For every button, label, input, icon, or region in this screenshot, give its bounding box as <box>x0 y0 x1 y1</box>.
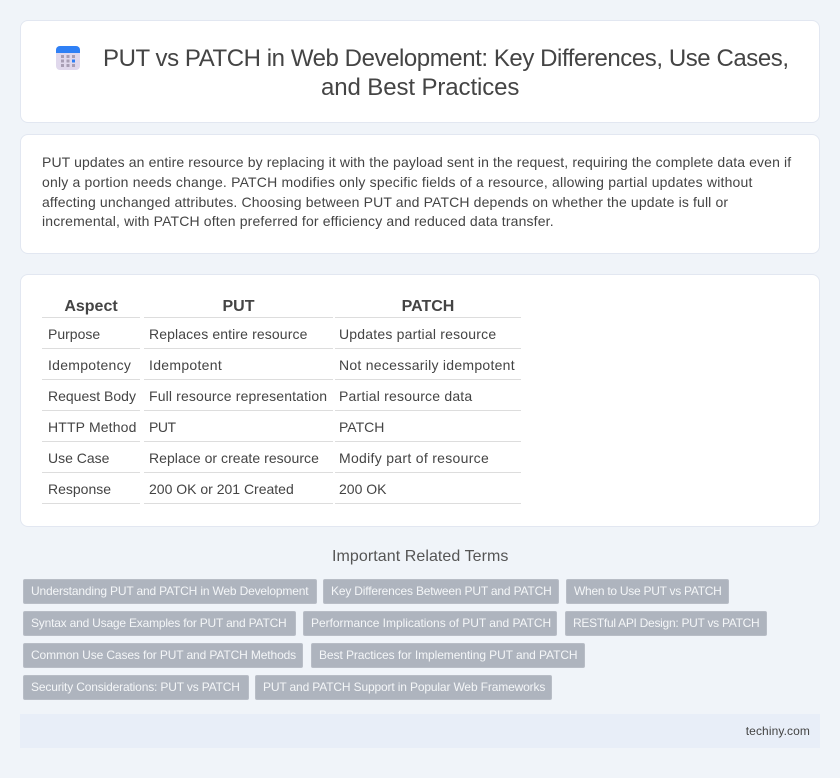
tag: Common Use Cases for PUT and PATCH Methods <box>31 648 296 662</box>
title: and Best Practices <box>321 74 519 101</box>
panel: header card <box>20 20 820 123</box>
row: Use Case: Replace or create resource <box>149 450 319 466</box>
row: Request Body: Request Body <box>48 388 136 404</box>
comparison table <box>42 298 521 504</box>
row: Request Body <box>42 388 521 411</box>
heading: important related terms: Important Related Terms <box>332 548 509 565</box>
text block: introduction: incremental, with PATCH often preferred for efficiency and reduced data transfer. <box>42 213 554 229</box>
row: Response <box>42 481 521 504</box>
row: Response: 200 OK or 201 Created <box>149 481 294 497</box>
row: Idempotency <box>42 357 521 380</box>
text block: introduction: affecting unchanged attributes. Choosing between PUT and PATCH depends on whether the update is full or <box>42 194 728 210</box>
tag <box>565 611 767 636</box>
tag: Understanding PUT and PATCH in Web Development <box>31 584 308 598</box>
tag: RESTful API Design: PUT vs PATCH <box>573 616 759 630</box>
row: Response: 200 OK <box>339 481 386 497</box>
row: Idempotency: Idempotent <box>149 357 222 373</box>
text block: introduction <box>42 154 792 229</box>
table header row <box>42 298 521 318</box>
row: Purpose: Purpose <box>48 326 100 342</box>
row: Use Case <box>42 450 521 473</box>
row: Purpose: Replaces entire resource <box>149 326 308 342</box>
tag: Performance Implications of PUT and PATCH <box>311 616 551 630</box>
title: PUT vs PATCH in Web Development: Key Differences, Use Cases, <box>103 45 789 72</box>
row: HTTP Method: HTTP Method <box>48 419 137 435</box>
tag: Key Differences Between PUT and PATCH <box>331 584 552 598</box>
tag <box>303 611 557 636</box>
panel: comparison table card <box>20 274 820 527</box>
row: HTTP Method: PUT <box>149 419 176 435</box>
panel: intro card <box>20 134 820 254</box>
tag <box>23 643 303 668</box>
tag: PUT and PATCH Support in Popular Web Frameworks <box>263 680 545 694</box>
row: Request Body: Partial resource data <box>339 388 472 404</box>
tag: Security Considerations: PUT vs PATCH <box>31 680 240 694</box>
tag <box>311 643 585 668</box>
table header row: PUT <box>222 298 254 315</box>
row: Request Body: Full resource representation <box>149 388 327 404</box>
icon: calendar <box>56 46 80 70</box>
text block: introduction: only a portion needs change. PATCH modifies only specific fields of a resource, allowing partial updates without <box>42 174 753 190</box>
row: HTTP Method <box>42 419 521 442</box>
row: Purpose: Updates partial resource <box>339 326 496 342</box>
row: Idempotency: Not necessarily idempotent <box>339 357 515 373</box>
row: Use Case: Modify part of resource <box>339 450 489 466</box>
tag <box>323 579 559 604</box>
tag: Syntax and Usage Examples for PUT and PATCH <box>31 616 287 630</box>
row: Purpose <box>42 326 521 349</box>
row: HTTP Method: PATCH <box>339 419 384 435</box>
footer brand: techiny.com <box>746 724 810 738</box>
tag <box>23 611 296 636</box>
tag: Best Practices for Implementing PUT and PATCH <box>319 648 578 662</box>
tag: When to Use PUT vs PATCH <box>574 584 722 598</box>
tag <box>255 675 552 700</box>
related term tags <box>23 579 767 700</box>
tag <box>23 579 317 604</box>
title <box>103 45 789 101</box>
row: Use Case: Use Case <box>48 450 109 466</box>
tag <box>23 675 249 700</box>
footer bar <box>20 714 820 748</box>
tag <box>566 579 729 604</box>
row: Response: Response <box>48 481 111 497</box>
table header row: Aspect <box>64 298 118 315</box>
row: Idempotency: Idempotency <box>48 357 131 373</box>
text block: introduction: PUT updates an entire resource by replacing it with the payload sent in the request, requiring the complete data even if <box>42 154 791 170</box>
table header row: PATCH <box>402 298 454 315</box>
